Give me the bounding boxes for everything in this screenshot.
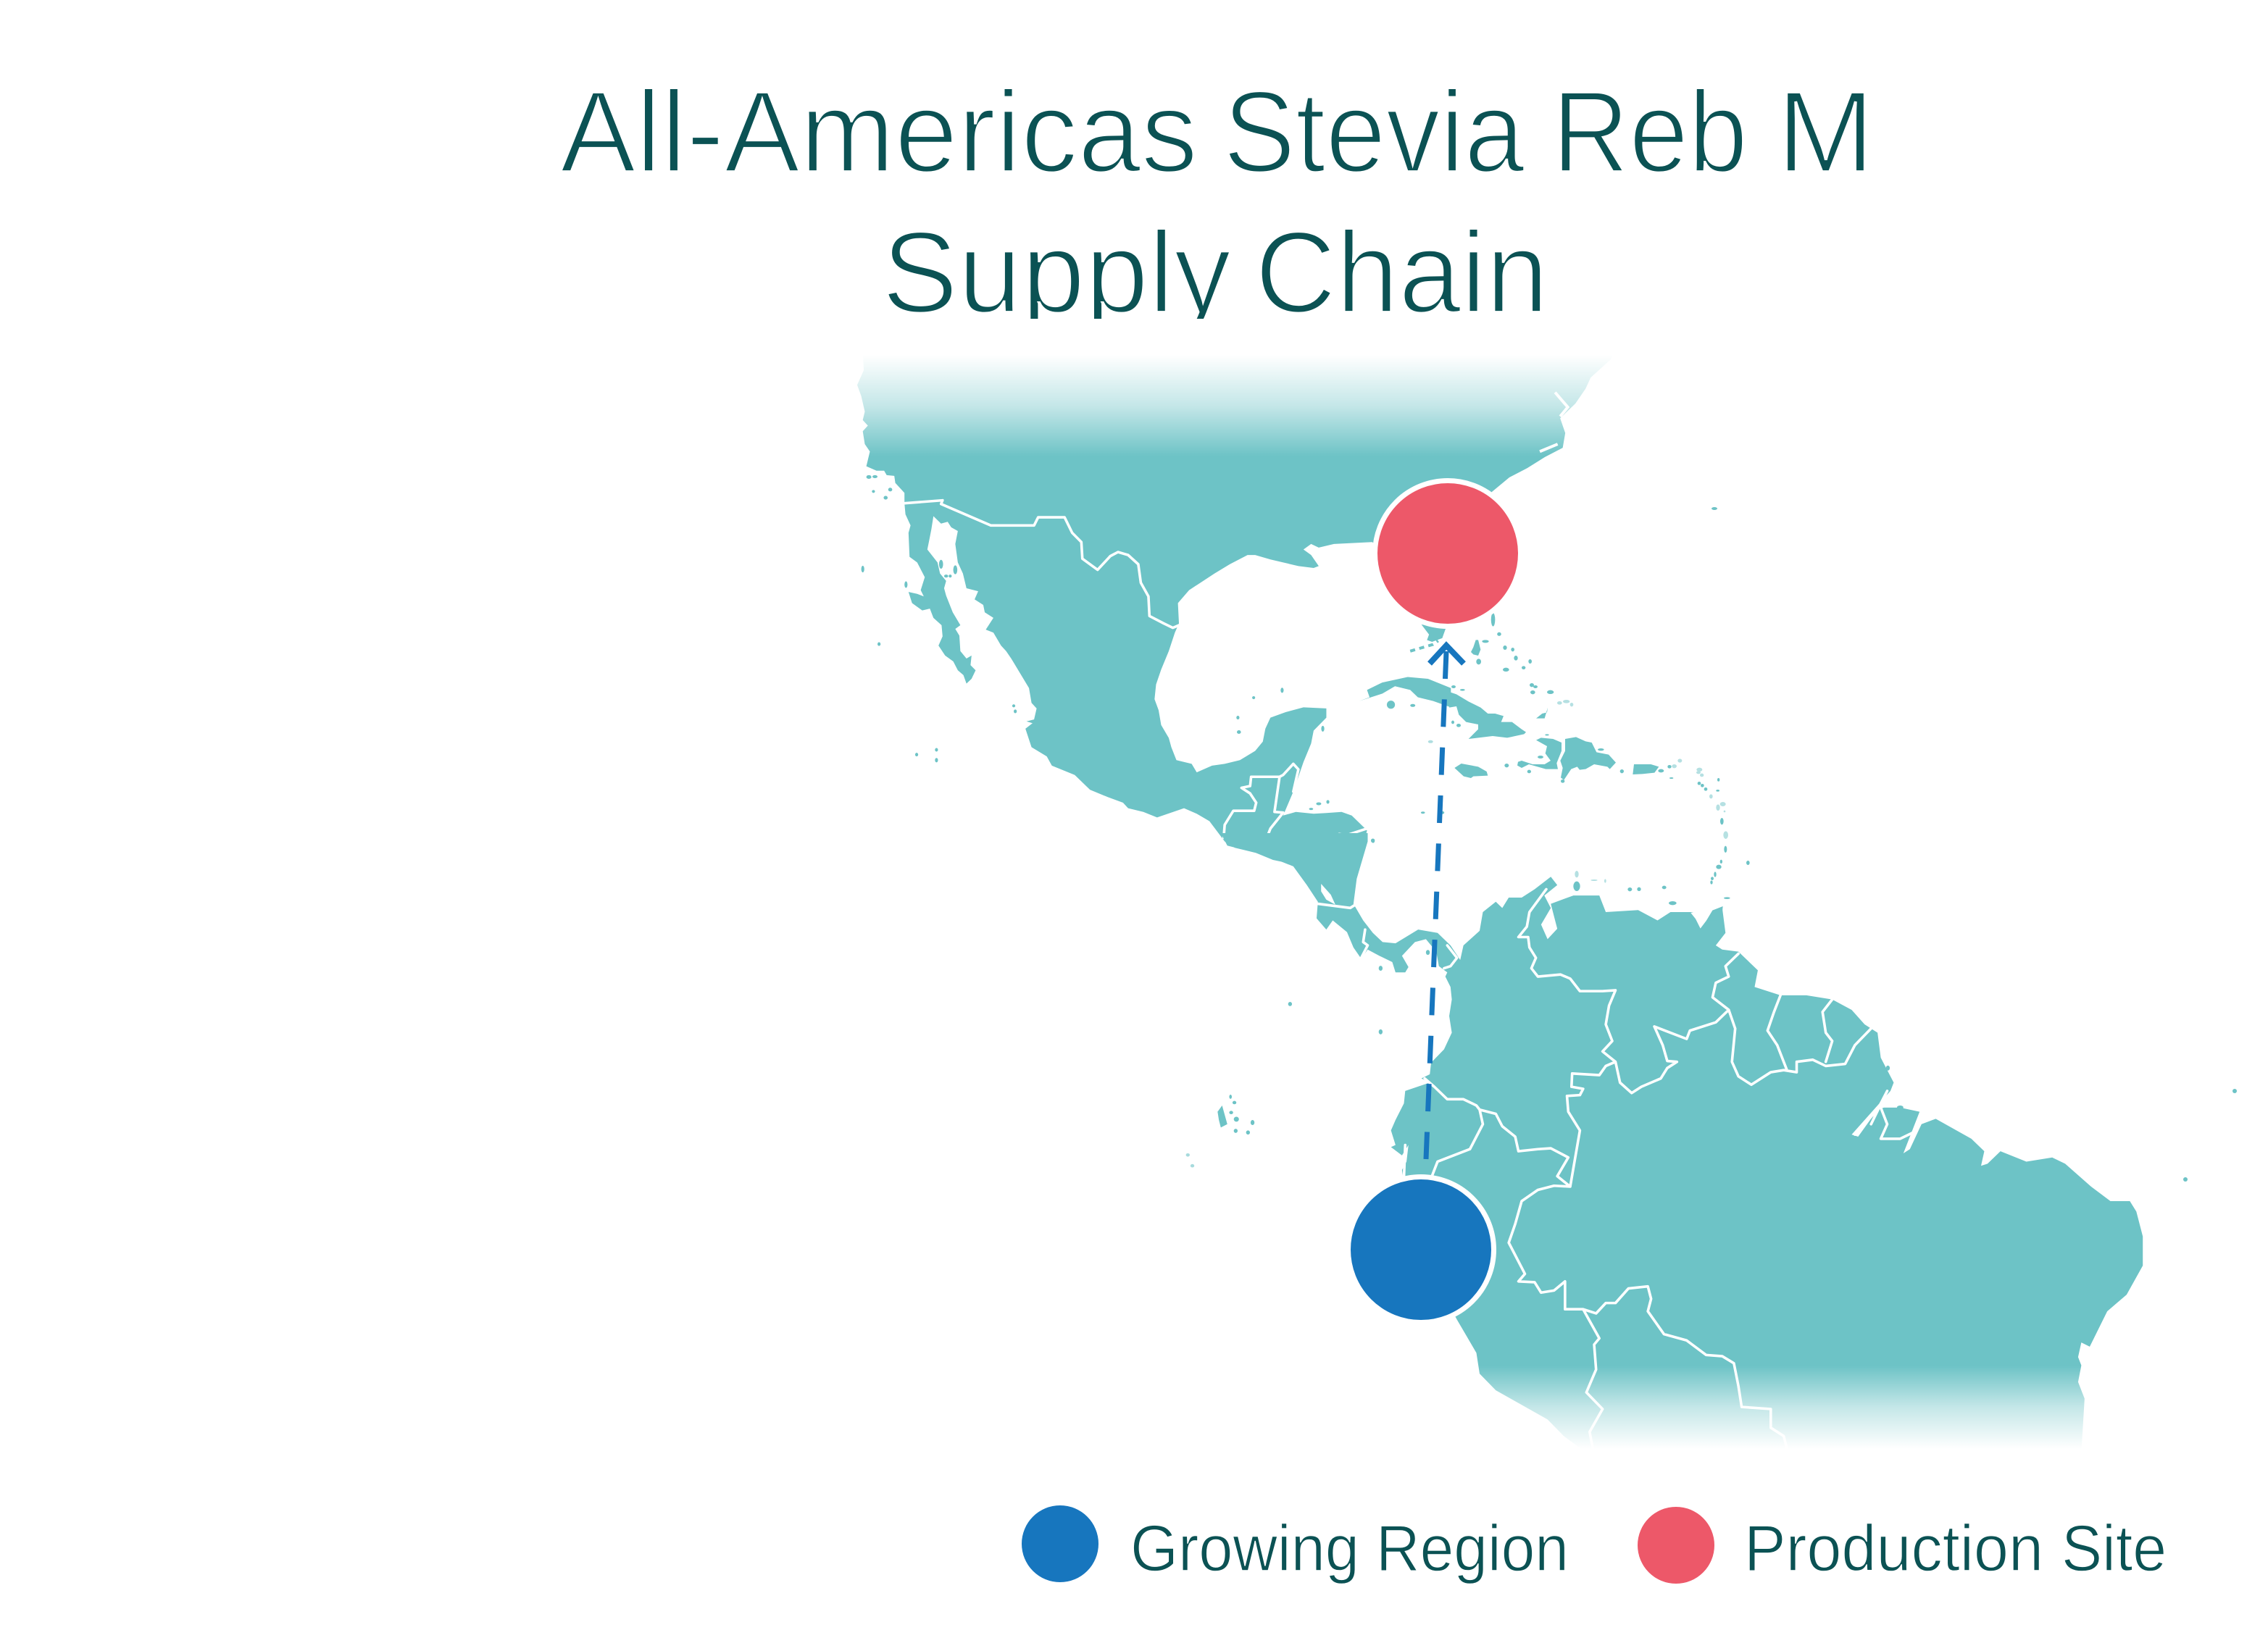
fading minor islands bbox=[1557, 700, 1728, 883]
bottom fade gradient bbox=[1377, 1366, 2174, 1449]
growing region marker bbox=[1348, 1176, 1494, 1323]
legend: production site: Production bbox=[1744, 1513, 2043, 1585]
production site marker bbox=[1375, 481, 1520, 626]
title bbox=[560, 67, 1875, 337]
map of the Americas bbox=[797, 319, 2237, 1478]
Gulf of Paria cut-out bbox=[1690, 908, 1714, 929]
Haiti bbox=[1517, 737, 1562, 769]
eastern Cuba bbox=[1449, 692, 1526, 739]
legend: production site: Site bbox=[2061, 1513, 2167, 1585]
Trinidad bbox=[1706, 906, 1723, 921]
US-Mexico border bbox=[904, 501, 1179, 628]
top fade gradient bbox=[797, 355, 1667, 458]
Mexico and Central America north borders bbox=[1224, 764, 1367, 866]
bottom white cover bbox=[1377, 1449, 2174, 1478]
legend bbox=[1022, 1505, 2167, 1585]
legend: growing region: Growing bbox=[1130, 1513, 1359, 1585]
title: All-Americas bbox=[560, 67, 1198, 196]
North and Central America landmass bbox=[857, 352, 1614, 866]
Central America lake and southern borders bbox=[1318, 884, 1457, 969]
Caribbean islands bbox=[1449, 640, 1750, 929]
Bahamas, Antilles and minor islands bbox=[1451, 640, 1750, 905]
dashed supply route arrow bbox=[1426, 645, 1464, 1159]
legend: growing region: Region bbox=[1376, 1513, 1569, 1585]
title: M bbox=[1777, 67, 1875, 196]
Jamaica bbox=[1454, 764, 1488, 778]
title: Stevia bbox=[1223, 67, 1525, 196]
east coast inlets bbox=[1540, 393, 1568, 451]
title: Supply bbox=[882, 207, 1231, 337]
small islands south bbox=[1186, 838, 1904, 1167]
Dominican Republic bbox=[1560, 737, 1616, 780]
western Cuba bbox=[1359, 677, 1451, 707]
top white cover bbox=[797, 319, 1667, 355]
South America landmass bbox=[1186, 833, 2143, 1453]
title: Chain bbox=[1255, 207, 1548, 337]
small islands north bbox=[862, 475, 1501, 843]
legend: growing region bbox=[1022, 1505, 1569, 1585]
South American country borders bbox=[1404, 889, 1919, 1449]
legend: production site bbox=[1638, 1507, 2167, 1585]
remote Atlantic islets bbox=[1712, 507, 2237, 1182]
Puerto Rico bbox=[1633, 764, 1659, 774]
title: Reb bbox=[1552, 67, 1748, 196]
